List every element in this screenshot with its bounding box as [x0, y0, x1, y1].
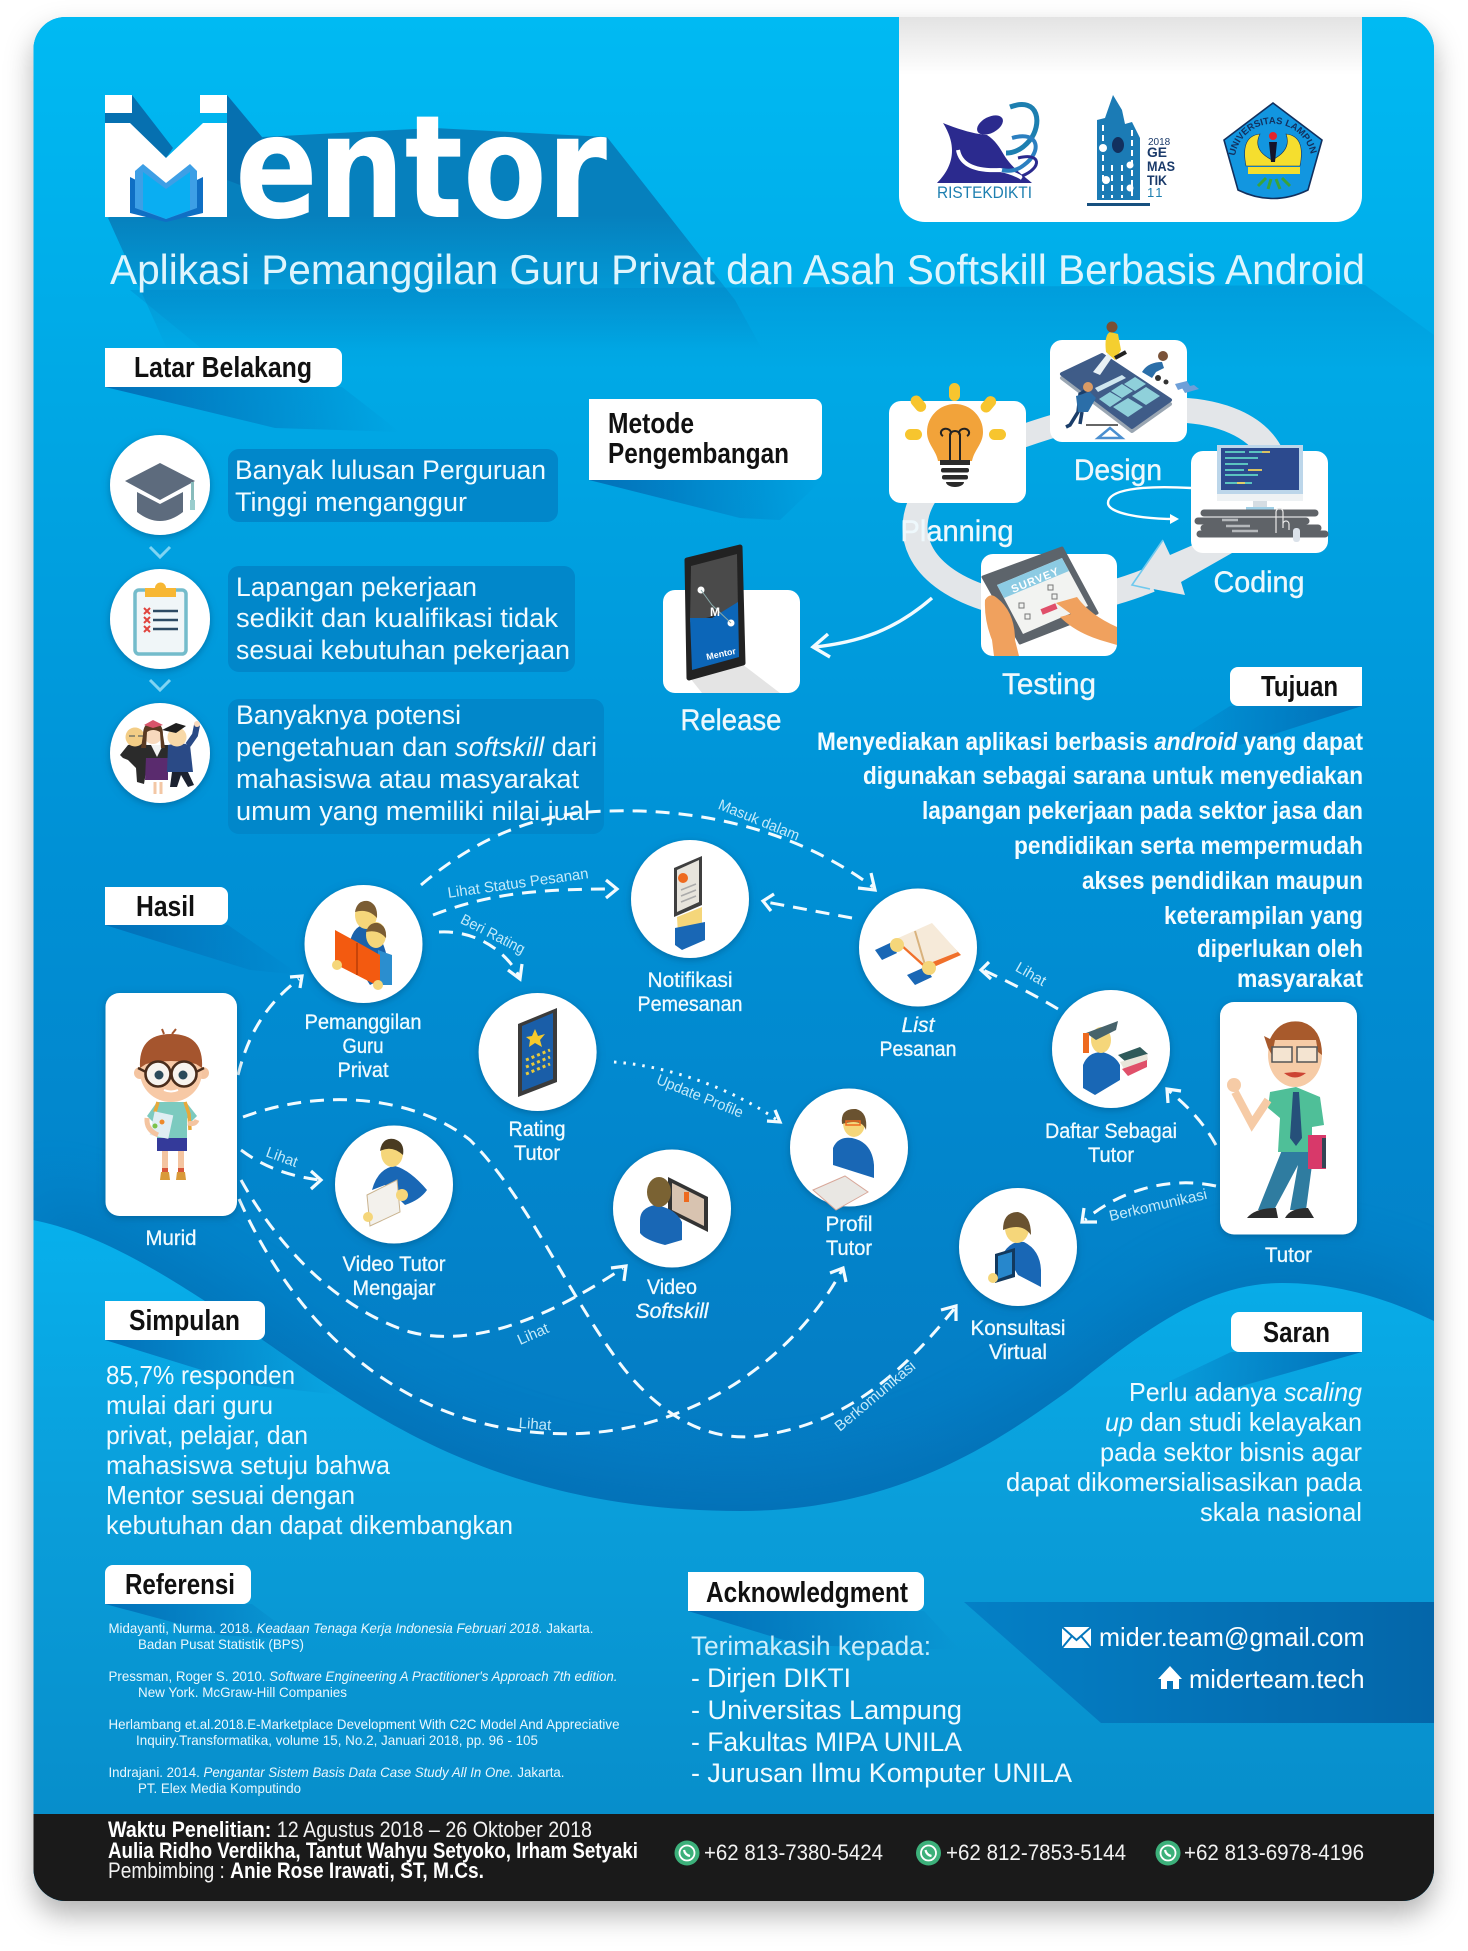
- step labels: Design: [1074, 454, 1162, 487]
- card: Release: [663, 547, 800, 693]
- node: Notifikasi Pemesanan: Notifikasi: [648, 969, 732, 992]
- phone 3: +62 813-6978-4196: [1184, 1840, 1364, 1865]
- text bubble: Tinggi menganggur: [235, 487, 467, 517]
- node: List Pesanan: [859, 888, 977, 1061]
- node: Daftar Sebagai Tutor: [1045, 990, 1177, 1167]
- text bubble: mahasiswa atau masyarakat: [236, 764, 579, 794]
- arrow: tutor to konsultasi: [1082, 1183, 1216, 1222]
- arrow labels: Update Profile: [654, 1071, 746, 1122]
- footer credits: Aulia Ridho Verdikha, Tantut Wahyu Setyoko, Irham Setyaki: [108, 1838, 638, 1863]
- text bubble: sesuai kebutuhan pekerjaan: [236, 635, 570, 665]
- text block: simpulan: Mentor sesuai dengan: [106, 1480, 355, 1510]
- arrow labels: [264, 796, 1209, 1435]
- heading: Latar Belakang: [105, 348, 400, 432]
- text block: tujuan: [817, 728, 1364, 993]
- text block: references: PT. Elex Media Komputindo: [138, 1780, 301, 1796]
- panel: latar belakang item 3: [110, 699, 604, 834]
- step labels: [680, 454, 1304, 737]
- text block: acknowledgment: - Jurusan Ilmu Komputer UNILA: [691, 1758, 1072, 1788]
- arrow labels: Lihat Status Pesanan: [447, 865, 590, 902]
- logo: Ristekdikti: [937, 105, 1037, 202]
- logo: Ristekdikti: RISTEKDIKTI: [937, 183, 1032, 202]
- arrow: beri rating: [439, 932, 522, 979]
- node: Rating Tutor: [479, 993, 597, 1165]
- text bubble: [228, 566, 575, 672]
- node: Profil Tutor: [790, 1088, 908, 1260]
- panel: Murid: [106, 993, 237, 1250]
- text block: tujuan: masyarakat: [1237, 965, 1364, 993]
- text block: tujuan: lapangan pekerjaan pada sektor jasa dan: [922, 797, 1363, 825]
- text block: saran: dapat dikomersialisasikan pada: [1006, 1467, 1363, 1497]
- node: Video Softskill: Video: [647, 1276, 697, 1299]
- text block: references: Inquiry.Transformatika, volume 15, No.2, Januari 2018, pp. 96 - 105: [136, 1732, 538, 1748]
- node: Konsultasi Virtual: Konsultasi: [970, 1317, 1066, 1340]
- node: Pemanggilan Guru Privat: Guru: [342, 1035, 384, 1058]
- text block: references: New York. McGraw-Hill Companies: [138, 1684, 347, 1700]
- node: Notifikasi Pemesanan: [631, 840, 749, 1016]
- arrow labels: Lihat: [264, 1144, 301, 1171]
- text block: references: Pressman, Roger S. 2010. Software Engineering A Practitioner's Approach 7th edition.: [108, 1668, 618, 1684]
- node: List Pesanan: List: [902, 1014, 936, 1037]
- text bubble: umum yang memiliki nilai jual: [236, 796, 590, 826]
- logo: Gemastik 11: MAS: [1147, 158, 1175, 174]
- icon: envelope: [1062, 1627, 1091, 1648]
- heading: Tujuan: Tujuan: [1261, 671, 1338, 703]
- text block: tujuan: akses pendidikan maupun: [1082, 867, 1363, 895]
- arrow labels: Beri Rating: [458, 911, 528, 958]
- logo: Gemastik 11: 2018: [1148, 137, 1171, 148]
- arrow: tutor to daftar: [1167, 1089, 1216, 1145]
- card: Testing: [981, 548, 1117, 656]
- text bubble: Banyak lulusan Perguruan: [235, 455, 546, 485]
- text block: acknowledgment: - Fakultas MIPA UNILA: [691, 1727, 962, 1757]
- node: Pemanggilan Guru Privat: [304, 885, 422, 1082]
- logo: Gemastik 11: GE: [1147, 144, 1167, 160]
- panel: Tutor: [1220, 1002, 1357, 1267]
- icon: book in the M: [130, 164, 203, 222]
- heading: Saran: [1130, 1312, 1362, 1400]
- heading: Saran: Saran: [1263, 1317, 1330, 1349]
- heading: Simpulan: [105, 1301, 340, 1395]
- footer bar: [34, 1814, 1434, 1901]
- heading: Acknowledgment: Acknowledgment: [706, 1577, 908, 1609]
- release arrow: [813, 598, 932, 657]
- heading: Hasil: Hasil: [136, 891, 195, 923]
- footer credits: [108, 1817, 638, 1883]
- text block: saran: [1006, 1377, 1363, 1527]
- text bubble: Banyaknya potensi: [236, 700, 461, 730]
- text block: simpulan: mulai dari guru: [106, 1390, 273, 1420]
- footer credits: Pembimbing : Anie Rose Irawati, ST, M.Cs.: [108, 1858, 484, 1883]
- footer credits: Waktu Penelitian: 12 Agustus 2018 – 26 Oktober 2018: [108, 1817, 592, 1842]
- text block: saran: pada sektor bisnis agar: [1100, 1437, 1362, 1467]
- node: Pemanggilan Guru Privat: Privat: [338, 1059, 389, 1082]
- text block: references: Herlambang et.al.2018.E-Marketplace Development With C2C Model And Appreciative: [108, 1716, 620, 1732]
- text bubble: [228, 699, 604, 834]
- text block: references: Indrajani. 2014. Pengantar Sistem Basis Data Case Study All In One. Jakarta.: [108, 1764, 564, 1780]
- contact band: mider.team@gmail.com: [1099, 1622, 1364, 1652]
- text bubble: [228, 449, 558, 522]
- icon: tutor man: [1227, 1021, 1326, 1218]
- heading: Referensi: [105, 1565, 300, 1640]
- text block: simpulan: kebutuhan dan dapat dikembangkan: [106, 1510, 513, 1540]
- node: Video Softskill: Softskill: [636, 1300, 710, 1323]
- arrow labels: Lihat: [518, 1415, 553, 1434]
- text block: simpulan: privat, pelajar, dan: [106, 1420, 308, 1450]
- text block: acknowledgment: - Dirjen DIKTI: [691, 1663, 851, 1693]
- heading: Simpulan: Simpulan: [129, 1305, 240, 1337]
- node: Video Softskill: [613, 1150, 731, 1323]
- chevron: [150, 547, 170, 557]
- step labels: Testing: [1002, 668, 1096, 701]
- card: Coding: [1191, 445, 1328, 553]
- text block: tujuan: pendidikan serta mempermudah: [1014, 832, 1363, 860]
- text block: tujuan: diperlukan oleh: [1197, 935, 1363, 963]
- text block: simpulan: mahasiswa setuju bahwa: [106, 1450, 391, 1480]
- text bubble: sedikit dan kualifikasi tidak: [236, 603, 558, 633]
- contact band: [964, 1602, 1434, 1723]
- icon: student boy: [134, 1029, 209, 1180]
- heading: Acknowledgment: [688, 1572, 960, 1650]
- arrow labels: Lihat: [515, 1320, 552, 1349]
- logo: Universitas Lampung: [1223, 102, 1323, 200]
- node: Profil Tutor: Tutor: [826, 1237, 872, 1260]
- node: Video Tutor Mengajar: Mengajar: [352, 1277, 436, 1300]
- logo panel: [899, 17, 1362, 222]
- heading: Latar Belakang: Latar Belakang: [134, 352, 312, 384]
- heading: Tujuan: [1160, 667, 1362, 750]
- node: Rating Tutor: Rating: [508, 1118, 566, 1141]
- card: Release: Mentor: [705, 646, 737, 662]
- icon: house: [1158, 1666, 1182, 1689]
- text block: simpulan: [106, 1360, 513, 1540]
- icon: clipboard: [110, 569, 210, 669]
- text block: references: Midayanti, Nurma. 2018. Keadaan Tenaga Kerja Indonesia Februari 2018. Jakarta.: [108, 1620, 594, 1636]
- arrow: murid to pemanggilan: [238, 976, 302, 1075]
- text block: saran: up dan studi kelayakan: [1105, 1407, 1362, 1437]
- logo: Mentor wordmark: [105, 84, 607, 251]
- arrow: lihat status pesanan: [433, 880, 617, 915]
- heading: Hasil: [105, 887, 300, 975]
- node: Video Tutor Mengajar: [335, 1126, 453, 1300]
- heading: Metode Pengembangan: [589, 399, 822, 520]
- flow arrows: [238, 796, 1216, 1437]
- node: Profil Tutor: Profil: [826, 1213, 872, 1236]
- chevron: [150, 680, 170, 690]
- arrow labels: Berkomunikasi: [1107, 1186, 1209, 1225]
- arrow: murid to konsultasi: [243, 1100, 956, 1437]
- card: Design: [1050, 322, 1199, 442]
- text block: tujuan: Menyediakan aplikasi berbasis android yang dapat: [817, 728, 1364, 756]
- logo: Gemastik 11: 11: [1147, 185, 1164, 200]
- panel: Tutor: Tutor: [1265, 1244, 1312, 1267]
- icon: graduation cap: [110, 435, 210, 535]
- card: Testing: SURVEY: [1010, 566, 1061, 596]
- arrow labels: Masuk dalam: [716, 796, 802, 844]
- arrow: pemanggilan to list pesanan: [421, 811, 875, 890]
- panel: Murid: Murid: [146, 1227, 196, 1250]
- arrow: lihat video tutor: [241, 1150, 321, 1189]
- node: Daftar Sebagai Tutor: Daftar Sebagai: [1045, 1120, 1177, 1143]
- node: Pemanggilan Guru Privat: Pemanggilan: [304, 1011, 422, 1034]
- text block: tujuan: keterampilan yang: [1164, 902, 1363, 930]
- arrow labels: Berkomunikasi: [832, 1358, 919, 1435]
- phone 1: +62 813-7380-5424: [704, 1840, 883, 1865]
- arrow: murid to video softskill: [241, 1180, 626, 1336]
- contact band: miderteam.tech: [1189, 1664, 1364, 1694]
- panel: latar belakang item 2: [110, 566, 575, 672]
- subtitle: Aplikasi Pemanggilan Guru Privat dan Asah Softskill Berbasis Android: [110, 246, 1365, 293]
- node: Konsultasi Virtual: Virtual: [989, 1341, 1047, 1364]
- text block: acknowledgment: Terimakasih kepada:: [691, 1631, 931, 1661]
- text block: references: [108, 1620, 620, 1796]
- heading: Referensi: Referensi: [125, 1569, 235, 1601]
- arrow: list to notifikasi: [763, 894, 852, 918]
- logo: Gemastik 11: [1087, 95, 1175, 206]
- heading: Metode Pengembangan: Pengembangan: [608, 438, 789, 470]
- step labels: Planning: [900, 515, 1014, 548]
- arrow: daftar to list: [981, 962, 1058, 1009]
- text block: simpulan: 85,7% responden: [106, 1360, 295, 1390]
- node: Video Tutor Mengajar: Video Tutor: [342, 1253, 446, 1276]
- ring arrow: [915, 410, 1270, 604]
- node: Rating Tutor: Tutor: [514, 1142, 560, 1165]
- text block: saran: Perlu adanya scaling: [1129, 1377, 1363, 1407]
- text block: saran: skala nasional: [1200, 1497, 1362, 1527]
- heading: Metode Pengembangan: Metode: [608, 408, 694, 440]
- text block: references: Badan Pusat Statistik (BPS): [138, 1636, 304, 1652]
- panel: latar belakang item 1: [110, 435, 558, 535]
- text block: acknowledgment: - Universitas Lampung: [691, 1695, 962, 1725]
- phone 2: +62 812-7853-5144: [946, 1840, 1126, 1865]
- card: Planning: [889, 383, 1026, 503]
- panel: development cycle: [663, 322, 1328, 737]
- node: Konsultasi Virtual: [959, 1188, 1077, 1364]
- logo: Mentor wordmark: entor: [235, 84, 607, 251]
- node: Daftar Sebagai Tutor: Tutor: [1088, 1144, 1134, 1167]
- logo: Gemastik 11: TIK: [1147, 172, 1167, 188]
- text block: acknowledgment: [691, 1631, 1072, 1788]
- step labels: Release: [680, 704, 782, 737]
- text block: tujuan: digunakan sebagai sarana untuk menyediakan: [863, 762, 1363, 790]
- card: Release: M: [710, 605, 720, 619]
- node: Notifikasi Pemesanan: Pemesanan: [638, 993, 742, 1016]
- arrow: murid to profil: [239, 1199, 846, 1434]
- node: List Pesanan: Pesanan: [880, 1038, 956, 1061]
- icon: graduates: [110, 703, 210, 803]
- text bubble: pengetahuan dan softskill dari: [236, 732, 597, 762]
- step labels: Coding: [1214, 566, 1304, 599]
- arrow: update profile: [614, 1062, 780, 1122]
- loop arrow: [1108, 487, 1191, 524]
- arrow labels: Lihat: [1012, 959, 1050, 990]
- text bubble: Lapangan pekerjaan: [236, 572, 477, 602]
